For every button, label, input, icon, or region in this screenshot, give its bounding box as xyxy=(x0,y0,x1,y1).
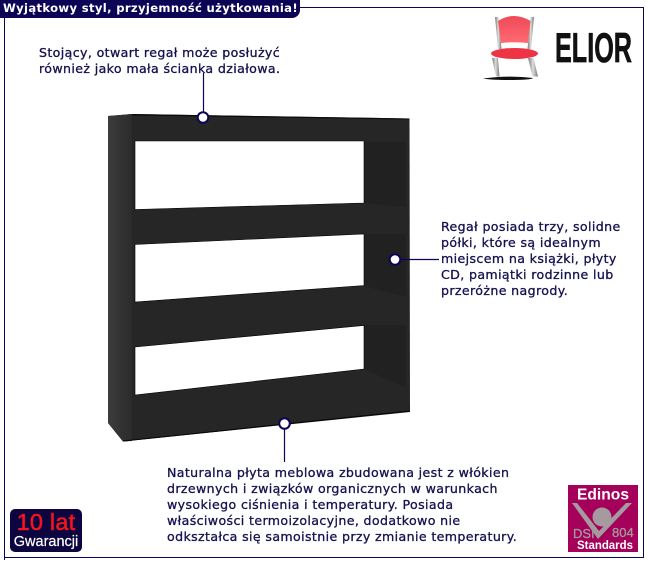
Standards label: Standards xyxy=(577,538,633,552)
text block: bottom callout: odkształca się samoistnie przy zmianie temperatury. xyxy=(167,529,517,544)
badge label: Gwarancji xyxy=(14,534,78,550)
text block: bottom callout: drzewnych i związków organicznych w warunkach xyxy=(167,481,498,496)
V mark xyxy=(572,503,632,539)
opening 3 xyxy=(135,326,364,395)
frame: right line xyxy=(643,7,644,558)
frame: left line xyxy=(4,16,5,560)
text block: top callout: również jako mała ścianka działowa. xyxy=(39,61,280,76)
text block: bottom callout: Naturalna płyta meblowa zbudowana jest z włókien xyxy=(167,465,509,480)
connector: bottom xyxy=(279,418,290,462)
text block: right callout xyxy=(441,219,621,298)
text block: right callout: CD, pamiątki rodzinne lub xyxy=(441,267,614,282)
shelf bottom edge xyxy=(123,410,410,442)
circle mark xyxy=(592,508,612,526)
shelf body xyxy=(108,114,410,442)
text block: right callout: przeróżne nagrody. xyxy=(441,283,568,298)
heading: Wyjątkowy styl, przyjemność użytkowania! xyxy=(3,1,298,15)
badge number: 10 lat xyxy=(17,509,75,535)
DSI label: DSI xyxy=(573,526,595,541)
shelf left side xyxy=(108,114,132,442)
shelf top edge xyxy=(132,114,410,120)
connector: right xyxy=(390,254,439,265)
text block: right callout: miejscem na książki, płyty xyxy=(441,251,617,266)
badge: Edinos Standards xyxy=(568,485,638,552)
Edinos name: Edinos xyxy=(577,486,629,504)
text block: bottom callout: wysokiego ciśnienia i temperatury. Posiada xyxy=(167,497,453,512)
icon: chair xyxy=(483,16,538,80)
frame: bottom line xyxy=(4,557,644,558)
text block: bottom callout: właściwości termoizolacyjne, dodatkowo nie xyxy=(167,513,461,528)
text block: right callout: półki, które są idealnym xyxy=(441,235,601,250)
logo: Elior xyxy=(483,16,632,80)
frame: top line xyxy=(298,7,644,8)
text block: bottom callout xyxy=(167,465,517,544)
badge: 10 years warranty xyxy=(10,509,82,552)
back right panel xyxy=(364,142,406,388)
text block: top callout: Stojący, otwart regał może posłużyć xyxy=(39,45,280,60)
text block: top callout xyxy=(39,45,280,76)
text block: right callout: Regał posiada trzy, solidne xyxy=(441,219,621,234)
connector: top xyxy=(198,73,208,123)
804 label: 804 xyxy=(612,525,634,540)
opening 1 xyxy=(135,141,364,210)
opening 2 xyxy=(135,234,364,302)
